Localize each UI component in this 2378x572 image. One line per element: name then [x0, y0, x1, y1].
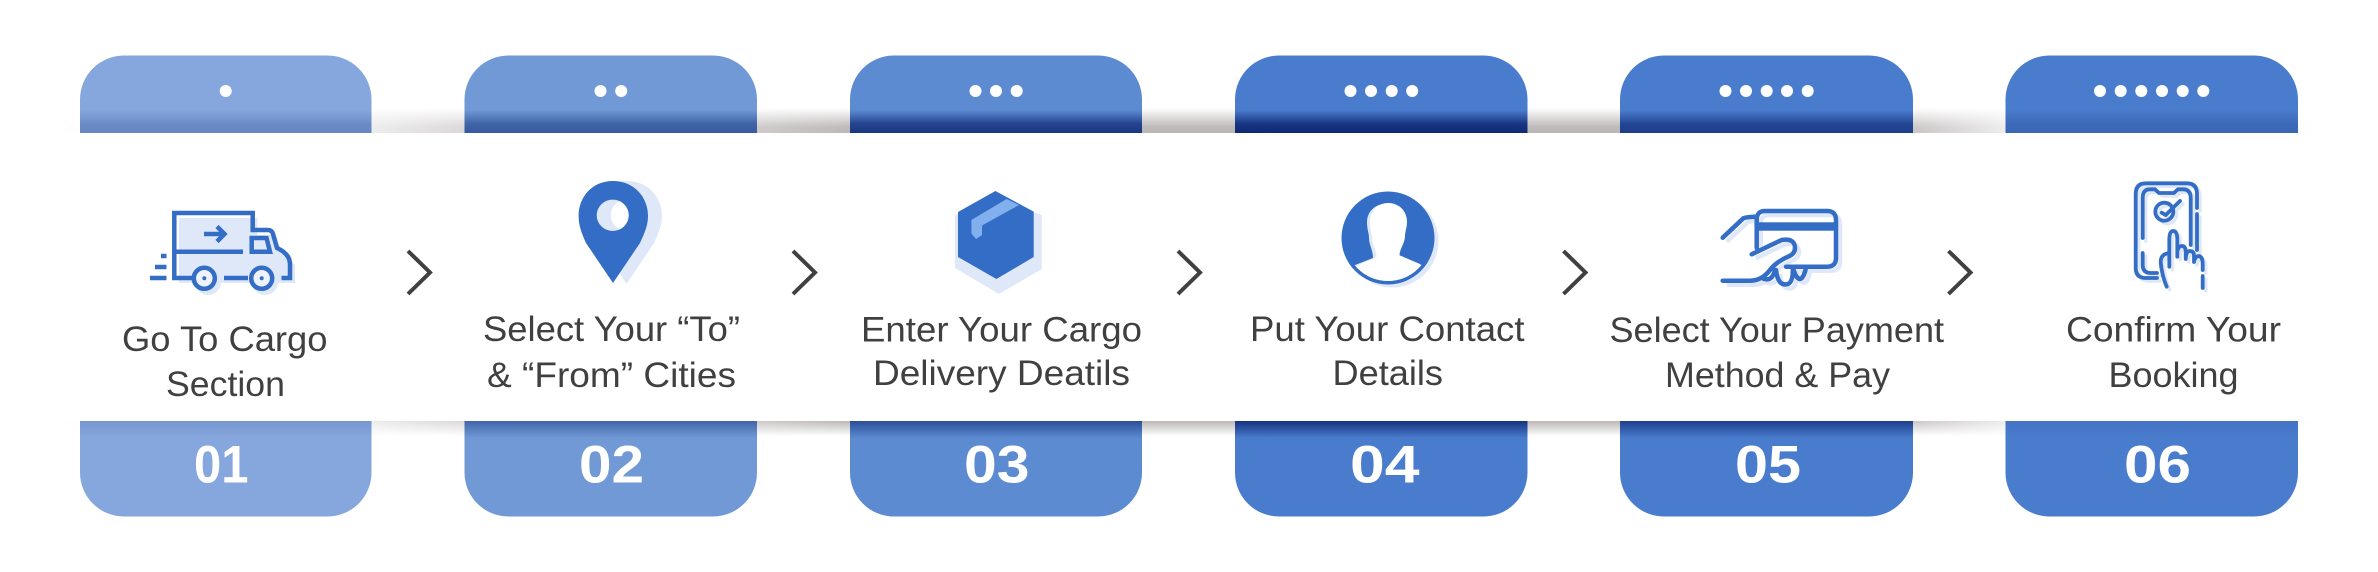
icon: delivery truck — [150, 213, 295, 295]
progress dots — [2094, 85, 2209, 97]
icon: parcel box — [955, 191, 1042, 294]
label: Select Your Payment — [1610, 311, 1944, 350]
label: Enter Your Cargo — [861, 310, 1142, 350]
top tab — [1620, 56, 1913, 133]
arrow 2 — [793, 251, 815, 294]
background shadow band: top — [372, 110, 2006, 133]
progress dots — [1720, 85, 1814, 97]
panel: step 4 — [1235, 56, 1528, 516]
step number: 05 — [1735, 436, 1801, 494]
label — [861, 310, 1142, 393]
background shadow band: bottom — [372, 421, 2006, 434]
step number: 03 — [964, 436, 1030, 494]
label — [483, 310, 740, 395]
panel: step 1 — [80, 56, 372, 516]
panel: step 2 — [464, 56, 757, 516]
bottom tab — [1235, 421, 1528, 516]
label — [122, 320, 328, 404]
progress dots — [220, 85, 232, 97]
step number: 01 — [194, 436, 248, 494]
label: Details — [1332, 354, 1443, 393]
label: Booking — [2108, 356, 2238, 395]
label: Confirm Your — [2066, 310, 2281, 350]
icon: user avatar — [1342, 192, 1438, 290]
step number: 02 — [579, 436, 644, 494]
step number: 04 — [1350, 436, 1420, 494]
arrow 1 — [408, 251, 430, 294]
bottom tab — [1620, 421, 1913, 516]
label: Method & Pay — [1665, 356, 1891, 395]
label: Go To Cargo — [122, 320, 328, 359]
label: Section — [166, 365, 285, 404]
icon: phone with tapping finger — [2136, 183, 2206, 291]
label — [2066, 310, 2281, 395]
step number: 06 — [2124, 436, 2191, 494]
arrow 3 — [1178, 251, 1200, 294]
label — [1610, 311, 1944, 395]
progress dots — [970, 85, 1023, 97]
label: Select Your “To” — [483, 310, 740, 349]
label: Delivery Deatils — [873, 354, 1130, 393]
icon: location pin — [579, 181, 662, 284]
progress dots — [1344, 85, 1418, 97]
panel: step 6 — [2006, 56, 2298, 516]
bottom tab — [2006, 421, 2298, 516]
panel: step 5 — [1610, 56, 1944, 516]
icon: hand holding payment card — [1723, 211, 1840, 288]
top tab — [464, 56, 757, 133]
label — [1250, 310, 1525, 393]
top tab — [2006, 56, 2298, 133]
top tab — [850, 56, 1142, 133]
arrow 4 — [1564, 251, 1586, 294]
panel: step 3 — [850, 56, 1142, 516]
top tab — [1235, 56, 1528, 133]
bottom tab — [850, 421, 1142, 516]
progress dots — [594, 85, 627, 97]
top tab — [80, 56, 372, 133]
bottom tab — [80, 421, 372, 516]
bottom tab — [464, 421, 757, 516]
arrow 5 — [1948, 251, 1970, 294]
label: Put Your Contact — [1250, 310, 1525, 349]
label: & “From” Cities — [487, 356, 736, 395]
